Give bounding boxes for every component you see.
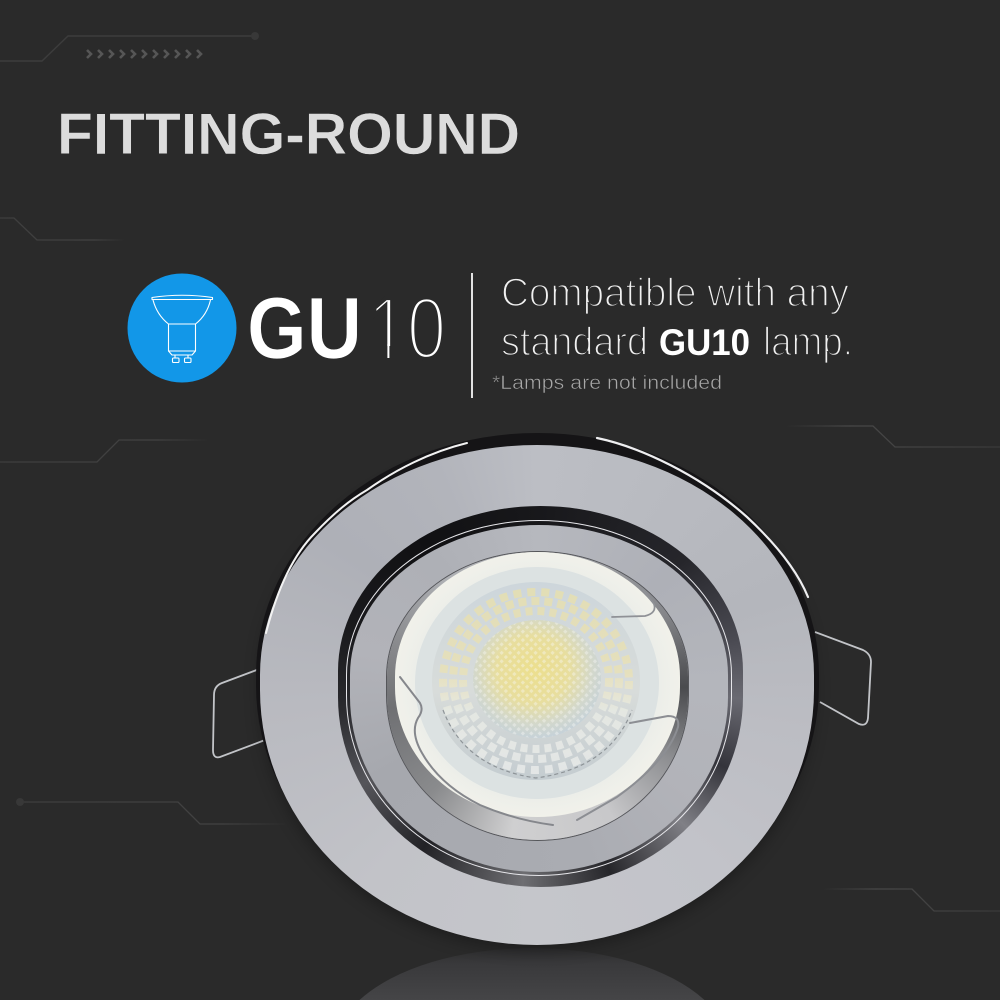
compatibility text block: *Lamps are not included (492, 373, 722, 394)
outer chrome plate (260, 445, 814, 945)
rim highlights (265, 436, 810, 634)
lens and dome (415, 567, 659, 799)
divider (471, 273, 472, 398)
spring clip: left (212, 669, 264, 758)
spring clip: right (814, 631, 872, 726)
reflection under fixture (360, 953, 704, 1000)
groove highlight (346, 520, 732, 876)
outer dark rim (256, 433, 819, 935)
lamp recess (387, 552, 688, 840)
inner chrome plate (350, 525, 728, 872)
compatibility text block: GU10 (659, 322, 750, 363)
lamp body (395, 552, 680, 817)
inner groove (338, 506, 743, 887)
compatibility text block: Compatible with any (501, 271, 849, 315)
icon: GU10 bulb in blue circle (128, 274, 236, 382)
soft shadow below ring (260, 445, 814, 945)
lamp retaining clips (399, 600, 680, 826)
fixture: chrome round downlight (212, 433, 872, 947)
compatibility text block (492, 271, 853, 394)
compatibility text block: lamp. (763, 320, 853, 364)
compatibility text block: standard (501, 320, 648, 364)
GU10 logotype (247, 290, 446, 366)
